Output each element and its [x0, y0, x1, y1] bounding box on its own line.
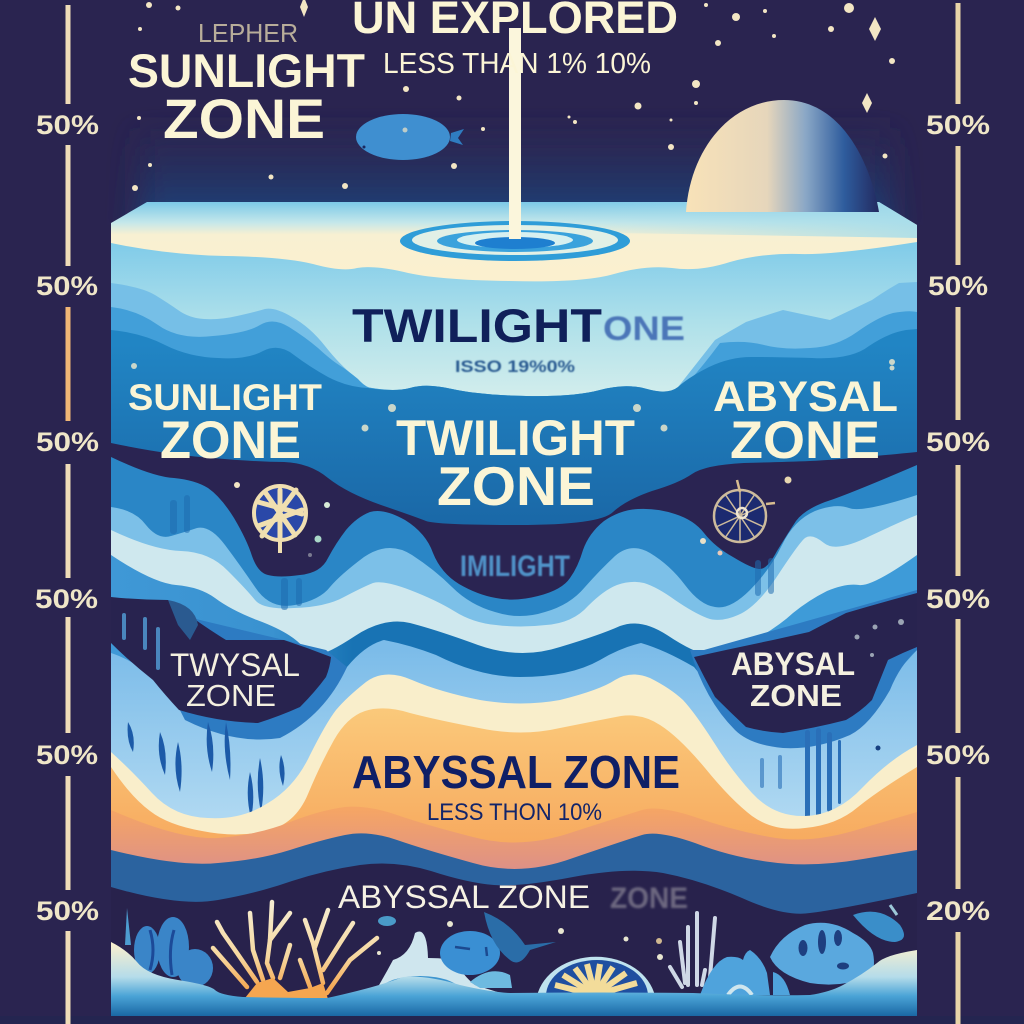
label: abysal zone lower right — [731, 646, 855, 713]
big holed coral — [770, 923, 874, 985]
heading: twilight zone dark: ONE — [603, 310, 685, 348]
seabed — [111, 942, 917, 1016]
sky glow above the sea surface — [140, 110, 890, 225]
layer: light blue wave — [111, 495, 917, 1016]
small fish — [378, 916, 396, 926]
right scale labels: 50% — [926, 584, 990, 614]
label: sunlight zone middle — [128, 377, 322, 470]
dots near the seabed — [377, 921, 663, 960]
faint label: twilight: IMILIGHT — [460, 550, 570, 583]
label: twysal zone: TWYSAL — [170, 647, 300, 683]
label: twysal zone — [170, 647, 300, 713]
faded label: zone: ZONE — [610, 882, 688, 915]
right scale rule — [956, 3, 960, 1024]
streaks in mid layers — [170, 495, 774, 610]
heading: sunlight zone top — [128, 44, 365, 150]
label: abysal zone right: ABYSAL — [713, 373, 898, 421]
vertical streaks right — [760, 728, 880, 820]
fish silhouette — [484, 912, 556, 962]
right scale labels: 50% — [926, 427, 990, 457]
left scale labels — [35, 110, 99, 926]
stars — [132, 0, 895, 191]
blue mound — [378, 976, 462, 1010]
dark streaks left — [128, 722, 285, 818]
coral base — [245, 978, 328, 999]
icon: left ship wheel — [234, 482, 330, 557]
label: twysal zone: ZONE — [186, 678, 276, 713]
sea surface slab — [111, 202, 917, 300]
white tube fingers — [670, 913, 715, 987]
layer: coral pink band — [111, 807, 917, 1016]
layer: cream band — [111, 674, 917, 1016]
shell — [537, 957, 655, 996]
layer: deep blue ribbon — [111, 555, 917, 1016]
left scale labels: 50% — [36, 740, 98, 770]
pale rock figure — [375, 931, 510, 996]
faded label: lepher: LEPHER — [198, 18, 298, 48]
label: abysal zone lower right: ZONE — [750, 678, 842, 713]
layer: light dome water — [111, 640, 917, 1016]
right scale labels: 20% — [926, 896, 990, 926]
label: twilight zone centre: ZONE — [437, 455, 595, 517]
top right fish — [853, 905, 904, 942]
heading: twilight zone dark — [352, 299, 685, 352]
label: abysal zone lower right: ABYSAL — [731, 646, 855, 682]
left scale rule — [66, 5, 70, 1024]
right scale labels — [926, 110, 990, 926]
label: abyssal zone bottom: ABYSSAL ZONE — [338, 879, 590, 915]
right scale labels: 50% — [926, 740, 990, 770]
dome moon on the horizon — [686, 100, 879, 212]
label: twilight zone centre: TWILIGHT — [396, 410, 635, 466]
heading: less than: LESS THAN 1% 10% — [383, 48, 651, 80]
dim fish and bars in left pocket — [122, 600, 198, 670]
heading: twilight zone dark: TWILIGHT — [352, 299, 602, 352]
right scale labels: 50% — [926, 110, 990, 140]
layer: dark purple trench — [111, 443, 917, 1016]
left dark pocket — [111, 597, 331, 723]
caption: less than: LESS THON 10% — [427, 799, 602, 826]
left scale labels: 50% — [36, 427, 99, 457]
dots in right pocket — [854, 619, 904, 657]
layer: medium blue wave — [111, 457, 917, 1016]
right dark pocket — [694, 593, 917, 733]
blue rock — [440, 931, 512, 988]
anemone left — [125, 908, 213, 987]
icon: water column — [509, 28, 521, 243]
label: sunlight zone middle: ZONE — [160, 411, 301, 470]
layer: deep blue water — [111, 329, 917, 1016]
icon: ripples — [400, 215, 630, 261]
layer: mid blue water — [111, 282, 917, 1016]
layer: pale wave — [111, 515, 917, 1016]
left scale labels: 50% — [36, 271, 98, 301]
branching coral — [213, 902, 377, 993]
layer: abyss — [111, 863, 917, 1016]
left blue rim around dark pocket — [111, 597, 347, 740]
sea surface right shading — [560, 202, 917, 238]
heading: sunlight zone top: SUNLIGHT — [128, 44, 365, 97]
right blue rim around dark pocket — [690, 590, 917, 748]
label: abysal zone right — [713, 373, 898, 470]
small dots in the deep layer — [131, 359, 895, 432]
layer: dark blue band — [111, 833, 917, 1016]
layer: upper light water — [111, 242, 917, 1016]
heading: sunlight zone top: ZONE — [163, 87, 325, 150]
left scale labels: 50% — [36, 110, 99, 140]
small blurred caption: ISSO 19%0% — [455, 357, 575, 376]
left scale labels: 50% — [35, 584, 98, 614]
layer: orange band — [111, 708, 917, 1016]
layer: stronger blue water — [111, 307, 917, 1016]
left scale labels: 50% — [36, 896, 99, 926]
right scale labels: 50% — [928, 271, 988, 301]
blue fish in the sky — [356, 114, 464, 160]
label: sunlight zone middle: SUNLIGHT — [128, 377, 322, 418]
heading: abyssal zone navy: ABYSSAL ZONE — [352, 746, 680, 798]
icon: right ship wheel — [700, 476, 792, 556]
label: abysal zone right: ZONE — [730, 411, 880, 470]
label: twilight zone centre — [396, 410, 635, 517]
bottom edge — [0, 1016, 1024, 1024]
middle rocks — [700, 950, 790, 995]
